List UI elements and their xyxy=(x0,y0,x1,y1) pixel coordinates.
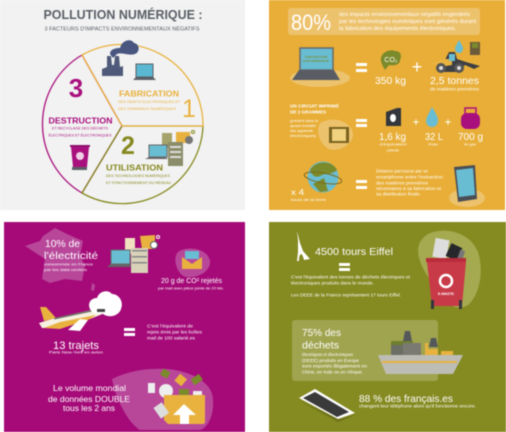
stat: 700 g: 700 g xyxy=(458,132,483,143)
callout: 75 percent: Chine, en Inde ou en Afrique. xyxy=(302,370,363,374)
stat: 10 percent electricity: par les data centers xyxy=(44,267,87,272)
equivalence text: rejets émis par les boîtes xyxy=(147,330,202,334)
callout: 75 percent: (DEEE) produits en Europe xyxy=(302,358,360,363)
icon: cargo ship xyxy=(378,331,463,374)
stat: 1,6 kg xyxy=(379,132,408,152)
fabrication description xyxy=(118,99,181,111)
number 3: 3 xyxy=(69,73,83,103)
utilisation description: ET FONCTIONNEMENT DU RÉSEAU xyxy=(106,180,171,185)
icon: folder with files xyxy=(148,369,205,424)
fabrication description: DES TERMINAUX NUMÉRIQUES xyxy=(118,106,177,111)
stat: x 4: x 4 xyxy=(291,188,305,197)
equals sign xyxy=(356,180,367,189)
destruction description xyxy=(48,126,112,138)
segment: fabrication xyxy=(82,44,203,126)
icon: airplane with cloud xyxy=(39,291,122,331)
icon: cracked smartphone xyxy=(299,389,358,422)
panel: waste xyxy=(269,222,506,432)
icon: servers and laptop xyxy=(107,235,160,273)
circuit note: des appareils xyxy=(290,129,313,133)
equivalence text: mail de 100 salarié.es xyxy=(147,336,195,340)
utilisation description xyxy=(106,173,171,185)
smartphone description: sa distribution finale. xyxy=(376,192,421,196)
data volume text xyxy=(48,383,130,413)
stat: 32 L: d'eau xyxy=(428,142,438,146)
icon: globe xyxy=(303,162,343,192)
panel: fabrication impacts xyxy=(269,0,505,210)
data volume text: Le volume mondial xyxy=(53,383,126,393)
smartphone description: smartphone entre l'extraction xyxy=(376,174,444,180)
callout: 75 percent: électriques et électroniques xyxy=(302,352,353,357)
icon: factory xyxy=(102,40,139,76)
circuit note: électroniques) xyxy=(290,134,317,138)
stat: 1,6 kg: 1,6 kg xyxy=(379,132,406,143)
smartphone description: nécessaires à sa fabrication et xyxy=(376,186,442,191)
icon: laptop xyxy=(290,48,350,87)
stat: 13 trajets xyxy=(49,340,103,354)
stat: 88 percent: changent leur téléphone alors qu'il fonctionne encore. xyxy=(359,404,476,408)
circuit heading xyxy=(290,102,339,114)
data volume text: tous les 2 ans xyxy=(63,403,115,413)
icon: water drop xyxy=(426,107,438,127)
stat: 20 g CO2: 20 g de CO² rejetés xyxy=(161,278,222,285)
circuit note: (présent dans la xyxy=(290,119,319,123)
utilisation heading: UTILISATION xyxy=(106,162,163,172)
data volume text: de données DOUBLE xyxy=(48,394,130,404)
destruction description: ET RECYCLAGE DES DÉCHETS xyxy=(52,126,109,130)
icon: CO2 cloud: CO₂ xyxy=(384,57,398,64)
equals sign xyxy=(124,328,135,336)
stat: 2,5 tonnes: de matières premières xyxy=(430,86,480,92)
callout: 80 percent: 80% xyxy=(291,10,331,35)
plus: + xyxy=(412,115,420,129)
circuit note xyxy=(290,119,319,138)
callout: 80 percent: par les technologies numériques sont générés durant xyxy=(339,19,477,25)
icon: red bin with devices: E-WASTE xyxy=(438,292,455,296)
panel: usage xyxy=(4,222,245,432)
plus: + xyxy=(444,115,452,129)
icon: laptop xyxy=(133,64,156,80)
icon: loader and resources xyxy=(430,40,480,73)
destruction description: ÉLECTRIQUES ET ÉLECTRONIQUES xyxy=(48,132,112,138)
stat: 10 percent electricity: l'électricité xyxy=(44,251,99,262)
subtitle: 3 FACTEURS D'IMPACTS ENVIRONNEMENTAUX NÉGATIFS xyxy=(44,26,200,32)
segment: utilisation xyxy=(82,126,203,204)
stat: 10 percent electricity: 10% de xyxy=(45,239,80,250)
stat: 2,5 tonnes: 2,5 tonnes xyxy=(430,76,479,87)
icon: gas bottle xyxy=(461,108,480,129)
equals sign xyxy=(356,119,367,127)
stat: 13 trajets: Paris New-York en avion xyxy=(49,350,103,354)
stat: 32 L: 32 L xyxy=(425,132,443,143)
callout: 80 percent xyxy=(288,8,480,35)
segment: destruction xyxy=(42,55,122,193)
smartphone description: des matières premières xyxy=(376,180,428,186)
stat: 10 percent electricity: consommée en France xyxy=(44,262,94,266)
utilisation description: DES TECHNOLOGIES NUMÉRIQUES xyxy=(106,173,171,178)
icon: servers and laptop xyxy=(145,130,194,166)
stat: 13 trajets: 13 trajets xyxy=(53,340,100,352)
stat: x 4: tours de la terre xyxy=(291,198,326,202)
smartphone description: Distance parcourue par un xyxy=(376,168,429,174)
map of France xyxy=(25,228,95,291)
waste description: léectroniques produits dans le monde. xyxy=(291,280,374,286)
icon: purple bin xyxy=(70,145,90,170)
fabrication heading: FABRICATION xyxy=(119,88,179,98)
waste description: C'est l'équivalent des tonnes de déchets électriques et xyxy=(291,274,411,280)
circuit heading: DE 2 GRAMMES xyxy=(290,110,326,114)
equals sign xyxy=(356,63,367,72)
plus: + xyxy=(412,57,422,77)
equals sign xyxy=(339,263,350,271)
stat: x 4 xyxy=(291,188,326,202)
callout: 75 percent: sont exportés illégalement en xyxy=(302,364,368,368)
stat: 20 g CO2 xyxy=(158,278,224,290)
icon: circuit chip xyxy=(318,120,353,150)
stat: 20 g CO2: par mail avec pièce jointe de 20 Mo. xyxy=(158,286,224,290)
icon: red bin with devices xyxy=(418,231,481,309)
equivalence text: C'est l'équivalent de xyxy=(147,324,194,328)
icon: CO2 cloud xyxy=(381,50,401,70)
circuit heading: UN CIRCUIT IMPRIMÉ xyxy=(290,102,339,108)
callout: 75 percent: 75% des xyxy=(302,327,341,339)
icon: laptop: CONSTRUCTION xyxy=(305,55,327,59)
number 1: 1 xyxy=(182,95,196,123)
callout: 80 percent: la fabrication des équipements électroniques. xyxy=(339,26,456,32)
title: POLLUTION NUMÉRIQUE : xyxy=(44,7,202,22)
callout: 75 percent xyxy=(292,320,438,381)
stat: 2,5 tonnes xyxy=(430,76,480,92)
equivalence text xyxy=(147,324,202,340)
icon: smartphone xyxy=(449,165,485,207)
smartphone description xyxy=(376,168,444,196)
circuit note: quasi-totalité xyxy=(290,124,316,128)
waste description: Les DEEE de la France représentent 17 tours Eiffel. xyxy=(291,292,401,298)
panel: pollution cycle xyxy=(0,0,245,210)
icon: laptop: D'UN ORDINATEUR xyxy=(303,59,329,63)
icon: email envelope xyxy=(175,249,210,277)
waste description xyxy=(291,274,411,298)
blob background xyxy=(112,369,213,430)
stat: 10 percent electricity xyxy=(44,239,99,272)
callout: 80 percent: des impacts environnementaux négatifs engendrés xyxy=(339,12,471,18)
icon: oil can xyxy=(386,108,401,126)
stat: 350 kg: 350 kg xyxy=(375,76,406,87)
fabrication description: DES OBJETS ÉLECTRONIQUES ET xyxy=(118,99,181,104)
stat: 1,6 kg: d'équivalent xyxy=(380,142,408,146)
number 2: 2 xyxy=(121,132,135,160)
stat: 88 percent: 88 % des français.es xyxy=(359,393,453,405)
destruction heading: DESTRUCTION xyxy=(48,116,112,126)
stat: 88 percent xyxy=(359,393,476,408)
stat: 700 g: de gaz xyxy=(464,142,476,146)
icon: Eiffel tower xyxy=(297,231,310,261)
heading: 4500 Eiffel towers: 4500 tours Eiffel xyxy=(315,246,393,258)
stat: 1,6 kg: pétrole xyxy=(387,148,400,152)
callout: 75 percent: déchets xyxy=(302,340,339,352)
